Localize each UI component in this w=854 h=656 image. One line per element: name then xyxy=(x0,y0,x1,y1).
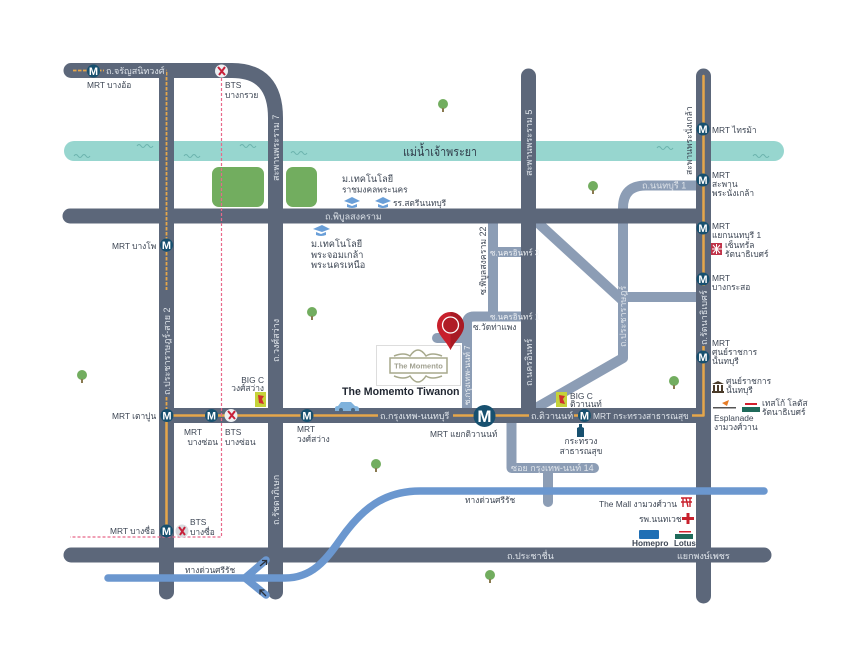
station labels: BTS xyxy=(225,427,242,437)
university labels: ม.เทคโนโลยี xyxy=(311,238,362,249)
trees xyxy=(77,99,679,583)
station labels: พระนั่งเกล้า xyxy=(712,187,754,198)
road labels: ซ.นครอินทร์ 1 xyxy=(490,312,540,322)
station labels: บางกรวย xyxy=(225,90,258,100)
MRT station icons: M xyxy=(162,240,171,252)
MRT station icons: M xyxy=(698,352,708,364)
road labels: MRT กระทรวงสาธารณสุข xyxy=(593,411,689,422)
dark road labels: ทางด่วนศรีรัช xyxy=(185,565,235,575)
road labels: แยกพงษ์เพชร xyxy=(677,550,730,561)
MRT station icons: M xyxy=(477,407,492,426)
MRT station icons: M xyxy=(207,410,216,422)
road labels: ถ.ประชาราษฎร์-สาย 2 xyxy=(161,307,172,395)
road labels: ถ.นนทบุรี 1 xyxy=(642,180,686,192)
road labels: ถ.ประชาราษฎร์ xyxy=(617,286,628,347)
road labels: ถ.นครอินทร์ xyxy=(523,339,534,386)
station labels: MRT xyxy=(184,427,202,437)
station labels: บางกระสอ xyxy=(712,282,750,292)
parks xyxy=(212,167,317,207)
minor roads xyxy=(437,186,696,502)
station labels: BTS xyxy=(190,517,207,527)
project name: The Momemto Tiwanon xyxy=(342,386,460,398)
landmark: Homepro: Homepro xyxy=(632,538,668,548)
river label: แม่น้ำเจ้าพระยา xyxy=(403,142,477,159)
landmark: Tesco Lotus: เทสโก้ โลตัส xyxy=(762,398,808,408)
station labels: วงศ์สว่าง xyxy=(297,434,330,444)
road labels: ถ.ติวานนท์ xyxy=(531,410,573,421)
station labels: แยกนนทบุรี 1 xyxy=(712,230,761,241)
BTS station icons xyxy=(176,64,238,538)
expressway arrows xyxy=(260,560,266,596)
station labels: MRT xyxy=(297,424,315,434)
MRT station icons: M xyxy=(580,410,589,422)
landmark: Central Rattanathibet xyxy=(711,240,769,259)
station labels: MRT xyxy=(712,221,730,231)
landmark: Esplanade xyxy=(713,400,758,432)
station labels: MRT บางซื่อ xyxy=(110,525,155,536)
MRT station icons: M xyxy=(698,223,708,235)
landmark: Central Rattanathibet: รัตนาธิเบศร์ xyxy=(725,249,769,259)
dark road labels: ซ.วัดท่าแพง xyxy=(473,322,516,332)
university icons xyxy=(313,197,391,236)
landmark: government centre: ศูนย์ราชการ xyxy=(726,376,772,387)
project logo: The Momento xyxy=(394,362,443,370)
road labels: ถ.จรัญสนิทวงศ์ xyxy=(106,65,165,76)
university labels: พระนครเหนือ xyxy=(311,260,365,270)
MRT station icons: M xyxy=(162,526,171,538)
university labels: ม.เทคโนโลยี xyxy=(342,173,393,184)
landmark: Big C Wongsawang xyxy=(231,375,266,407)
road labels: ถ.รัตนาธิเบศร์ xyxy=(698,290,709,345)
dark road labels: สะพานพระนั่งเกล้า xyxy=(683,106,694,175)
station labels: MRT xyxy=(712,170,730,180)
station labels: MRT บางอ้อ xyxy=(87,80,131,90)
road labels: ซ.นครอินทร์ 3 xyxy=(490,248,540,258)
landmark: Esplanade: งามวงศ์วาน xyxy=(714,422,758,432)
landmark: Nonthavej hospital: รพ.นนทเวช xyxy=(639,514,682,524)
landmark: Esplanade: Esplanade xyxy=(714,413,754,423)
station labels: MRT เตาปูน xyxy=(112,411,156,422)
landmark: government centre: นันทบุรี xyxy=(726,385,753,396)
dark road labels: ซ.พิบูลสงคราม 22 xyxy=(478,226,489,295)
road labels: ถ.พิบูลสงคราม xyxy=(325,212,382,222)
station labels: MRT แยกติวานนท์ xyxy=(430,429,497,439)
station labels: MRT xyxy=(712,338,730,348)
station labels: บางซ่อน xyxy=(187,437,218,447)
landmark: Central Rattanathibet: เซ็นทรัล xyxy=(725,240,754,250)
car xyxy=(335,402,359,412)
MRT station icons: M xyxy=(698,124,708,136)
landmark: Big C Wongsawang: วงศ์สว่าง xyxy=(231,383,264,393)
expressway xyxy=(108,491,764,595)
BTS line xyxy=(70,78,222,537)
station labels: ศูนย์ราชการ xyxy=(712,347,758,358)
university labels xyxy=(311,173,447,270)
landmark: Homepro xyxy=(632,530,668,548)
road labels: สะพานพระราม 7 xyxy=(271,115,281,181)
river: Chao Phraya xyxy=(64,141,784,161)
landmark: Ministry of Public Health: สาธารณสุข xyxy=(560,446,602,457)
road labels: ถ.กรุงเทพ-นนทบุรี xyxy=(380,411,450,422)
road labels: ซ.กรุงเทพ-นนท์ 7 xyxy=(462,345,472,405)
MRT station icons: M xyxy=(162,410,172,422)
MRT station icons: M xyxy=(698,175,708,187)
MRT station icons xyxy=(87,64,710,538)
landmark: The Mall Ngamwongwan xyxy=(599,497,693,509)
road labels xyxy=(106,65,730,561)
landmark: Tesco Lotus xyxy=(742,398,808,417)
landmark: Big C Tiwanon: ติวานนท์ xyxy=(570,399,602,409)
station labels: BTS xyxy=(225,80,242,90)
landmark: Big C Tiwanon xyxy=(556,391,602,409)
major roads xyxy=(70,70,764,596)
road label backings xyxy=(104,64,710,422)
landmark: government centre xyxy=(712,376,772,396)
station labels: MRT บางโพ xyxy=(112,241,156,251)
road labels: สะพานพระราม 5 xyxy=(524,110,534,176)
landmark: Lotus: Lotus xyxy=(674,539,696,548)
location pin xyxy=(437,312,464,350)
road labels: ถ.ประชาชื่น xyxy=(507,549,554,561)
road labels: ถ.วงศ์สว่าง xyxy=(270,319,281,362)
university labels: ราชมงคลพระนคร xyxy=(342,184,408,194)
landmark: Big C Tiwanon: BIG C xyxy=(570,391,593,401)
MRT line, solid section xyxy=(166,76,704,525)
landmark: Ministry of Public Health xyxy=(560,424,602,457)
station labels: บางซื่อ xyxy=(190,526,215,537)
MRT station icons: M xyxy=(302,410,312,422)
MRT line, planned section xyxy=(73,70,166,416)
station labels: MRT ไทรม้า xyxy=(712,125,757,135)
university labels: รร.สตรีนนทบุรี xyxy=(393,198,447,209)
landmark: Ministry of Public Health: กระทรวง xyxy=(565,436,597,446)
dark road labels xyxy=(185,106,694,575)
MRT station icons: M xyxy=(698,274,708,286)
landmark: Big C Wongsawang: BIG C xyxy=(241,375,264,385)
station labels: บางซ่อน xyxy=(225,437,256,447)
road labels: ถ.รัชดาภิเษก xyxy=(271,475,281,525)
station labels: นันทบุรี xyxy=(712,356,739,367)
landmark: The Mall Ngamwongwan: The Mall งามวงศ์วาน xyxy=(599,499,677,509)
station labels xyxy=(87,80,761,537)
road labels: ซอย กรุงเทพ-นนท์ 14 xyxy=(511,462,594,474)
MRT station icons: M xyxy=(89,66,98,78)
project logo xyxy=(376,346,460,386)
landmark: Tesco Lotus: รัตนาธิเบศร์ xyxy=(762,407,806,417)
station labels: สะพาน xyxy=(712,179,738,189)
landmark: Lotus xyxy=(674,531,696,548)
dark road labels: ทางด่วนศรีรัช xyxy=(465,495,515,505)
station labels: MRT xyxy=(712,273,730,283)
university labels: พระจอมเกล้า xyxy=(311,250,363,260)
